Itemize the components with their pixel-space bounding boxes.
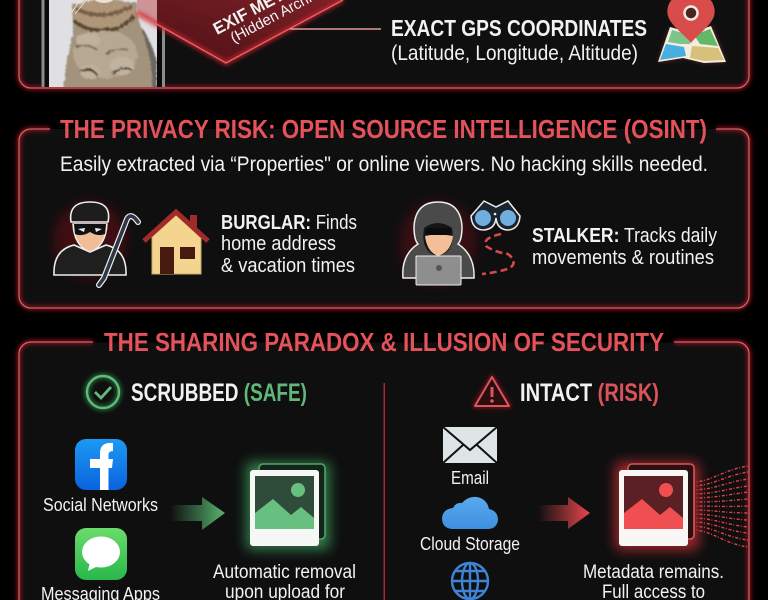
gps detail: (Latitude, Longitude, Altitude) xyxy=(391,41,638,65)
gps heading: EXACT GPS COORDINATES xyxy=(391,15,647,41)
icon: safe photo xyxy=(246,462,330,550)
icon: binoculars xyxy=(471,201,520,230)
icon: map pin xyxy=(658,0,726,63)
sharing heading: THE SHARING PARADOX & ILLUSION OF SECURITY xyxy=(104,327,664,357)
column: scrubbed xyxy=(41,376,356,600)
burglar text: & vacation times xyxy=(221,254,355,277)
cat body xyxy=(63,0,157,90)
safe caption xyxy=(213,562,356,600)
icon: risk photo xyxy=(615,462,699,550)
arrow: red xyxy=(538,497,590,529)
stalker text: movements & routines xyxy=(532,246,714,269)
risk caption: Metadata remains. xyxy=(583,562,724,583)
burglar text: BURGLAR: Finds xyxy=(221,211,357,234)
stalker text: STALKER: Tracks daily xyxy=(532,224,718,247)
data stream xyxy=(692,466,748,547)
burglar text: home address xyxy=(221,232,336,255)
icon: check circle xyxy=(87,376,119,408)
phone with cat photo xyxy=(41,0,165,90)
exif wedge xyxy=(137,0,343,63)
column: intact xyxy=(420,377,748,600)
arrow: green xyxy=(170,497,225,530)
email label: Email xyxy=(451,468,489,488)
safe caption: Automatic removal xyxy=(213,562,356,583)
connector line xyxy=(290,28,381,30)
scrubbed heading: SCRUBBED (SAFE) xyxy=(131,379,307,407)
risk caption xyxy=(583,562,724,600)
icon: email xyxy=(443,427,497,463)
whiskers xyxy=(72,0,88,14)
crowbar xyxy=(99,216,138,285)
cloud storage label: Cloud Storage xyxy=(420,534,520,554)
icon: house xyxy=(144,212,208,274)
social networks label: Social Networks xyxy=(43,495,158,515)
icon: messages xyxy=(75,528,127,580)
panel: exif metadata xyxy=(19,0,749,90)
dashed track xyxy=(482,234,514,274)
icon: cloud xyxy=(442,497,498,529)
icon: stalker xyxy=(400,201,476,285)
icon: burglar xyxy=(54,202,138,285)
center divider xyxy=(384,383,385,600)
osint subtitle: Easily extracted via “Properties" or online viewers. No hacking skills needed. xyxy=(60,152,708,176)
stalker text xyxy=(532,224,718,269)
icon: warning triangle xyxy=(475,377,509,406)
icon: facebook xyxy=(75,439,127,490)
icon: globe xyxy=(452,563,488,599)
panel: osint privacy risk xyxy=(19,112,749,308)
panel: sharing paradox xyxy=(19,325,749,600)
burglar text xyxy=(221,211,357,277)
intact heading: INTACT (RISK) xyxy=(520,379,659,407)
